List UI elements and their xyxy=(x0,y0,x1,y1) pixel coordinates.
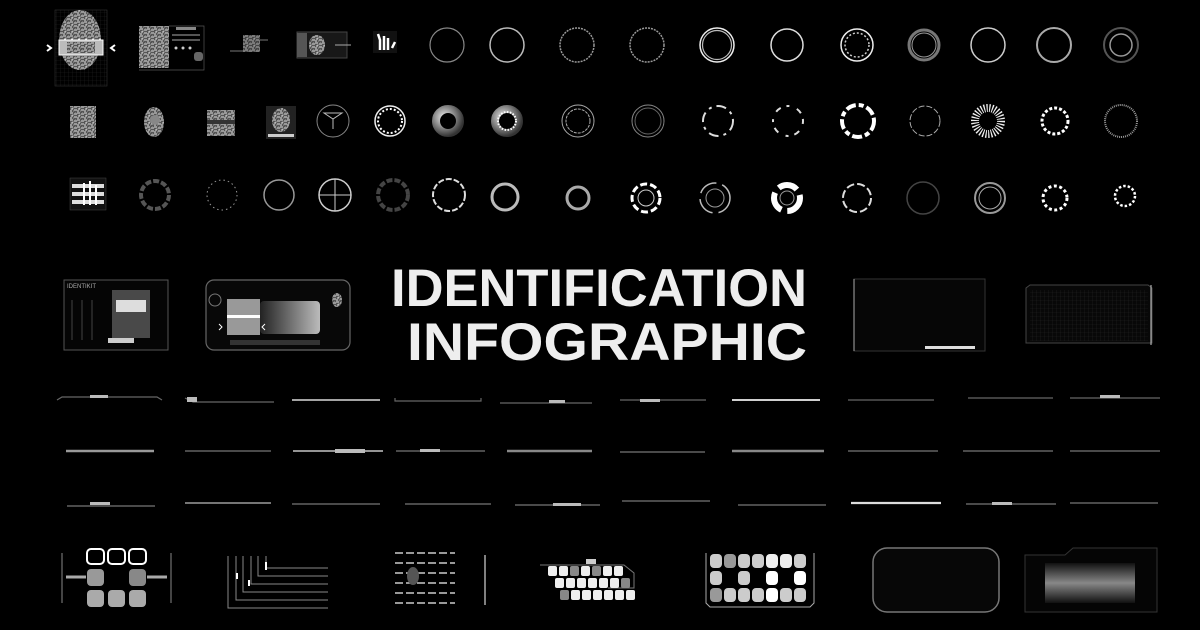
icon: fingerprint document panel xyxy=(139,26,204,70)
title: IDENTIFICATION xyxy=(391,259,807,318)
icon: small scan square xyxy=(230,35,268,52)
icon: large fingerprint scanner xyxy=(47,10,115,86)
title: INFOGRAPHIC xyxy=(407,313,807,372)
icon: hand with bars row 3 xyxy=(70,178,106,210)
title xyxy=(391,259,807,372)
panel: identikit: IDENTIKIT xyxy=(67,284,96,290)
panel: right frame 2 xyxy=(1026,285,1152,345)
divider lines: three rows xyxy=(57,395,1160,506)
rings: row 2 xyxy=(317,105,1137,137)
icon: face scan xyxy=(297,32,351,58)
rings: row 1 xyxy=(430,28,1138,62)
module: step lines xyxy=(228,556,328,608)
panel: face scanner device xyxy=(206,280,350,350)
panel: right frame 1 xyxy=(854,279,985,351)
module: capsule matrix xyxy=(706,553,814,607)
icons: row 2 fingerprints xyxy=(70,106,296,139)
module: capsule grid xyxy=(62,549,171,607)
module: rounded screen xyxy=(873,548,999,612)
module: key grid xyxy=(540,559,635,600)
module: gradient folder panel xyxy=(1025,548,1157,612)
panel: identikit xyxy=(64,280,168,350)
icon: hand print xyxy=(373,31,397,53)
module: hex grid xyxy=(382,547,485,609)
rings: row 3 xyxy=(141,179,1135,214)
